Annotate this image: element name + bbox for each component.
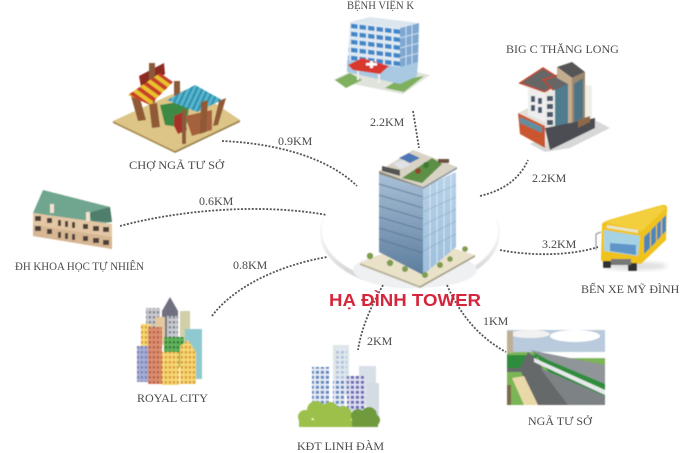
- label: Royal City: ROYAL CITY: [137, 391, 208, 405]
- distance: Royal City: 0.8KM: [233, 258, 268, 272]
- icon: hospital: [333, 17, 430, 94]
- tower roof: [379, 150, 457, 187]
- roof equipment: [382, 166, 400, 176]
- icon: road junction: [507, 330, 605, 405]
- tower left facade: [379, 173, 423, 275]
- distance: hospital: 2.2KM: [370, 115, 405, 129]
- distance: Big C: 2.2KM: [532, 171, 567, 185]
- icon: Linh Dam urban area: [298, 345, 380, 427]
- distance: road junction: 1KM: [483, 314, 509, 328]
- label: Linh Dam: KĐT LINH ĐÀM: [297, 439, 384, 453]
- distance: Linh Dam: 2KM: [367, 334, 393, 348]
- label: university: ĐH KHOA HỌC TỰ NHIÊN: [15, 259, 144, 273]
- dotted connector lines: [120, 111, 598, 352]
- icon: Royal City towers: [137, 297, 202, 385]
- distance: market: 0.9KM: [278, 134, 313, 148]
- icon: university: [33, 190, 112, 249]
- distance: university: 0.6KM: [199, 194, 234, 208]
- tower right facade: [423, 172, 456, 275]
- tower: Hạ Đình: [360, 150, 475, 288]
- distance: bus station: 3.2KM: [542, 237, 577, 251]
- icon: bus: [596, 205, 667, 271]
- tower base plaza: [360, 238, 475, 286]
- central platform ellipse: [320, 177, 500, 288]
- trees: [367, 246, 468, 278]
- label: Big C: BIG C THĂNG LONG: [506, 42, 619, 56]
- label: road junction: NGÃ TƯ SỞ: [528, 414, 593, 428]
- label: bus station: BẾN XE MỸ ĐÌNH: [581, 281, 680, 296]
- icon: Big C building: [518, 62, 610, 152]
- icon: market: [113, 63, 240, 153]
- label: market: CHỢ NGÃ TƯ SỞ: [129, 158, 225, 172]
- title: HẠ ĐÌNH TOWER: [329, 289, 481, 310]
- roof garden: [402, 158, 442, 183]
